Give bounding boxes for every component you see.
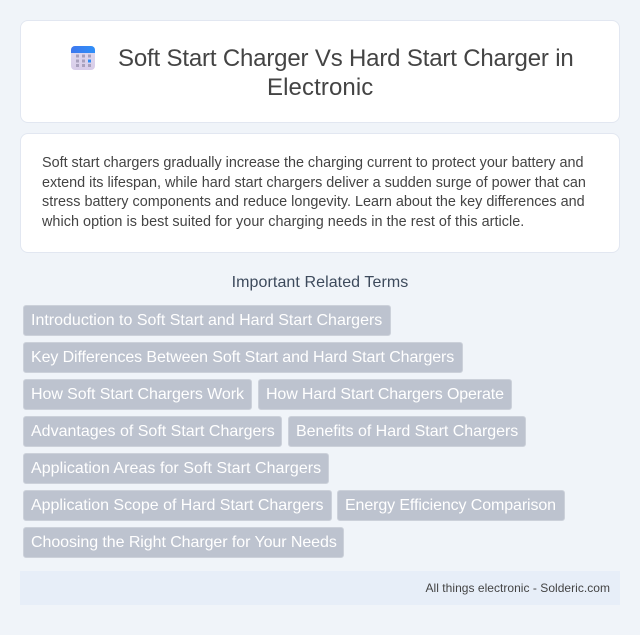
text block: introduction: which option is best suited for your charging needs in the rest of this article. bbox=[42, 214, 524, 230]
tag: How Hard Start Chargers Operate bbox=[266, 386, 504, 403]
tag: Application Areas for Soft Start Chargers bbox=[31, 460, 321, 477]
text block: introduction bbox=[42, 155, 586, 230]
tag bbox=[23, 305, 391, 336]
tag: Introduction to Soft Start and Hard Start Chargers bbox=[31, 312, 382, 329]
tag bbox=[337, 490, 565, 521]
tag: Application Scope of Hard Start Chargers bbox=[31, 497, 324, 514]
tag bbox=[23, 453, 329, 484]
tag bbox=[23, 416, 282, 447]
tag: Benefits of Hard Start Chargers bbox=[296, 423, 518, 440]
icon: calendar grid bbox=[71, 46, 95, 70]
footer bbox=[20, 571, 620, 605]
tag list: related terms bbox=[23, 305, 565, 558]
tag bbox=[23, 490, 332, 521]
title bbox=[118, 45, 574, 101]
title: Electronic bbox=[267, 74, 373, 101]
panel: title card bbox=[20, 20, 620, 123]
tag: Choosing the Right Charger for Your Needs bbox=[31, 534, 337, 551]
title: Soft Start Charger Vs Hard Start Charger in bbox=[118, 45, 574, 72]
tag: How Soft Start Chargers Work bbox=[31, 386, 244, 403]
tag bbox=[288, 416, 526, 447]
text block: introduction: extend its lifespan, while hard start chargers deliver a sudden surge of power that can bbox=[42, 175, 586, 191]
tag bbox=[23, 379, 252, 410]
tag: Energy Efficiency Comparison bbox=[345, 497, 556, 514]
text block: introduction: stress battery components and reduce longevity. Learn about the key differences and bbox=[42, 194, 585, 210]
footer: All things electronic - Solderic.com bbox=[426, 581, 610, 595]
tag bbox=[23, 527, 344, 558]
tag bbox=[258, 379, 512, 410]
heading: related terms: Important Related Terms bbox=[232, 274, 408, 291]
tag bbox=[23, 342, 463, 373]
text block: introduction: Soft start chargers gradually increase the charging current to protect your battery and bbox=[42, 155, 583, 171]
tag: Advantages of Soft Start Chargers bbox=[31, 423, 275, 440]
panel: introduction bbox=[20, 133, 620, 253]
tag: Key Differences Between Soft Start and Hard Start Chargers bbox=[31, 349, 454, 366]
